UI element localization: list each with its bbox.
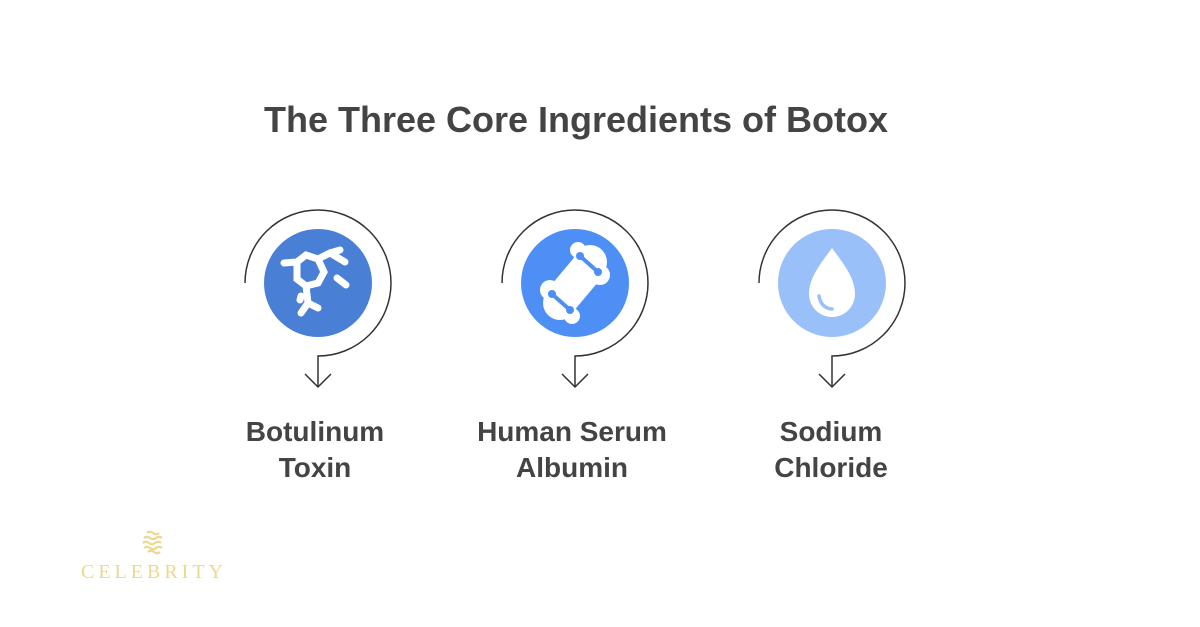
item: sodium chloride: Chloride bbox=[774, 452, 888, 483]
logo bbox=[81, 532, 227, 583]
arrow arc 2 bbox=[502, 210, 648, 387]
icon: molecule bbox=[264, 229, 372, 337]
label: Sodium bbox=[780, 416, 882, 447]
arrow arc 3 bbox=[759, 210, 905, 387]
arrow arc 1 bbox=[245, 210, 391, 387]
icon: protein bbox=[521, 229, 629, 337]
item: human serum albumin: Albumin bbox=[516, 452, 628, 483]
item: sodium chloride bbox=[759, 210, 905, 483]
item: human serum albumin bbox=[477, 210, 667, 483]
item: botulinum toxin: Toxin bbox=[279, 452, 351, 483]
label: Botulinum bbox=[246, 416, 384, 447]
label: Human Serum bbox=[477, 416, 667, 447]
icon: water drop bbox=[778, 229, 886, 337]
logo mark bbox=[143, 532, 162, 553]
item: botulinum toxin bbox=[245, 210, 391, 483]
logo text: CELEBRITY bbox=[81, 561, 227, 583]
title: The Three Core Ingredients of Botox bbox=[264, 99, 888, 140]
